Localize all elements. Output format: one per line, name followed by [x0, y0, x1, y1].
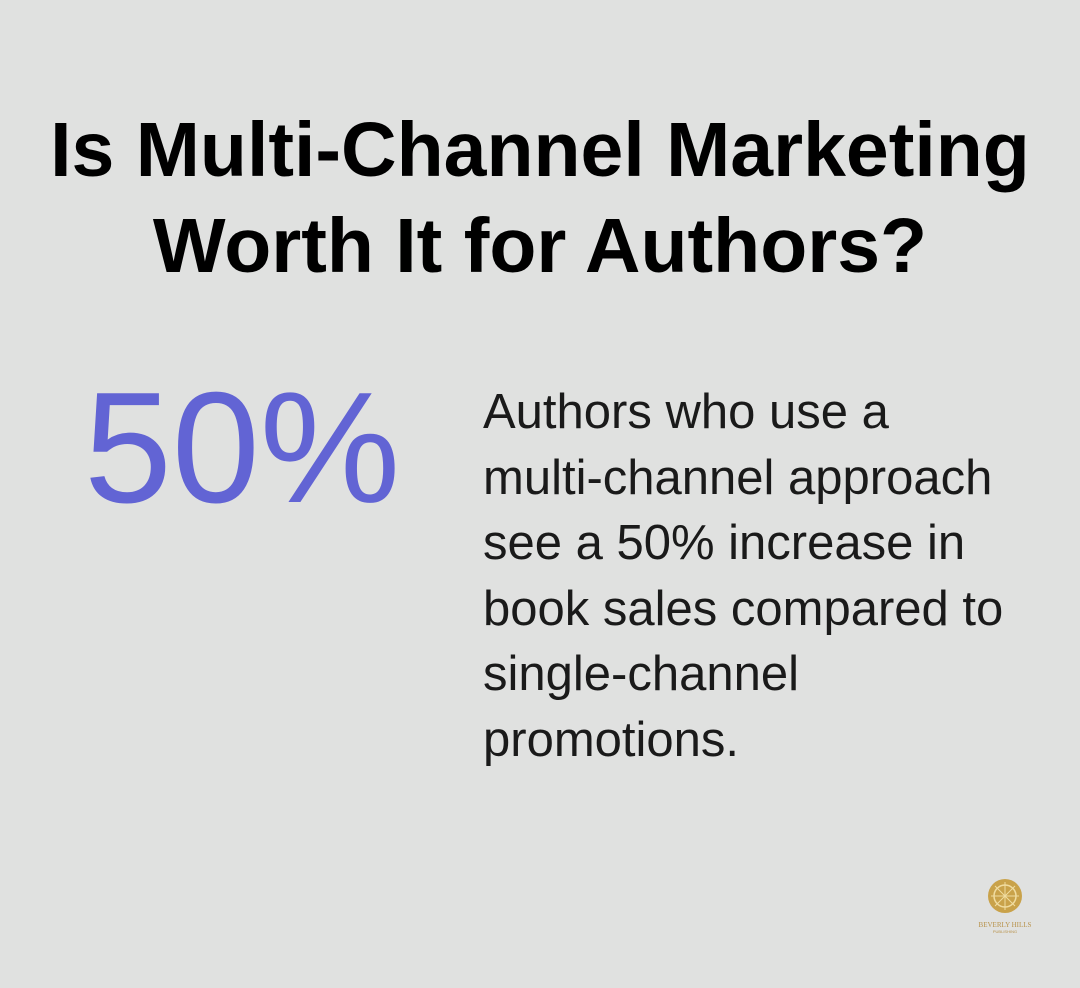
logo: PUBLISHING [993, 929, 1017, 934]
description text: book sales compared to [483, 582, 1003, 636]
description text: promotions. [483, 713, 739, 767]
title: Is Multi-Channel Marketing [50, 107, 1030, 193]
title [50, 107, 1030, 289]
description text [483, 385, 1003, 767]
description text: multi-channel approach [483, 451, 992, 505]
description text: see a 50% increase in [483, 516, 965, 570]
description text: single-channel [483, 647, 799, 701]
logo [978, 879, 1031, 934]
description text: Authors who use a [483, 385, 889, 439]
logo: BEVERLY HILLS [979, 921, 1031, 929]
title: Worth It for Authors? [153, 203, 927, 289]
big statistic: 50% [84, 360, 400, 536]
